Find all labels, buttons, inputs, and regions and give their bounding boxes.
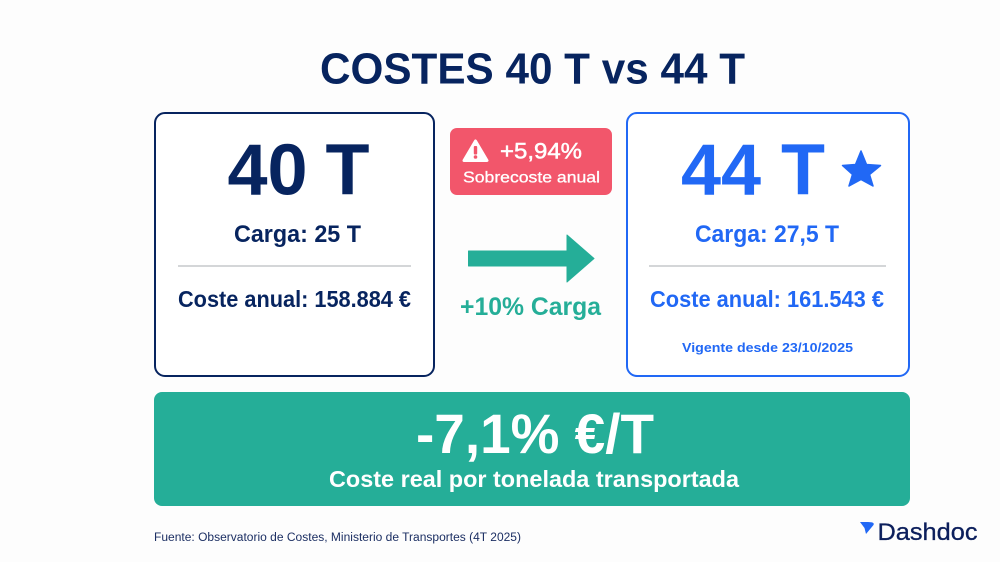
load: 27,5 T: Carga: 27,5 T — [695, 221, 839, 248]
panel heading: 40 T: T — [326, 130, 370, 210]
load: 25 T: Carga: 25 T — [234, 221, 361, 248]
panel heading: 44 T: T — [781, 130, 825, 210]
annual cost: 40 T: Coste anual: 158.884 € — [178, 286, 411, 312]
arrow: 40 T to 44 T — [468, 235, 594, 282]
source note: Fuente: Observatorio de Costes, Ministerio de Transportes (4T 2025) — [154, 532, 521, 544]
logo wordmark: Dashdoc — [878, 519, 978, 546]
panel heading: 40 T: 40 — [228, 130, 308, 210]
banner: cost per tonne — [154, 392, 910, 506]
load increase label: +10% Carga — [460, 293, 602, 321]
panel: 40 T — [155, 113, 434, 376]
annual cost: 44 T: Coste anual: 161.543 € — [650, 286, 884, 312]
panel heading: 44 T: 44 — [681, 130, 761, 210]
title: COSTES 40 T vs 44 T — [320, 44, 745, 94]
banner caption: Coste real por tonelada transportada — [329, 466, 739, 492]
icon: star — [842, 151, 880, 186]
icon: logo mark — [860, 522, 874, 534]
panel: 44 T — [627, 113, 909, 376]
callout: annual surcharge — [450, 128, 612, 195]
logo: Dashdoc — [860, 519, 978, 546]
surcharge label: Sobrecoste anual — [463, 170, 600, 186]
icon: warning triangle — [464, 141, 487, 160]
effective date: Vigente desde 23/10/2025 — [682, 340, 853, 355]
surcharge percentage: +5,94% — [500, 138, 582, 164]
banner figure: -7,1% €/T — [416, 402, 654, 465]
